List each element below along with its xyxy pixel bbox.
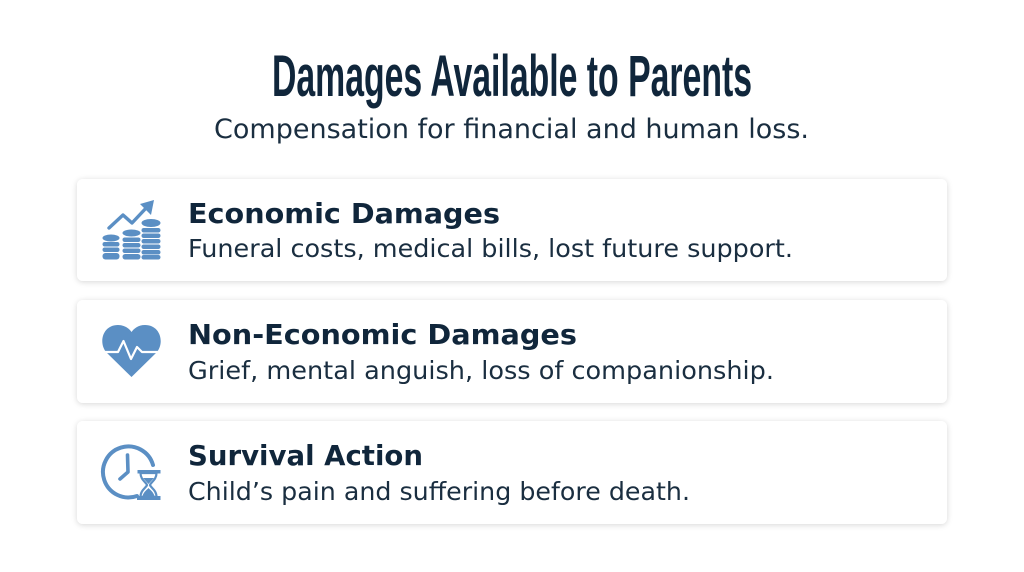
heading: non-economic damages: Non-Economic Damages	[188, 318, 577, 351]
panel: survival action	[77, 421, 947, 524]
heading: survival action: Survival Action	[188, 439, 423, 472]
subtitle: Compensation for financial and human loss.	[214, 114, 809, 145]
icon: heart with pulse	[102, 325, 161, 377]
panel: non-economic damages	[77, 300, 947, 403]
icon: clock with hourglass	[103, 446, 160, 500]
text: economic damages detail: Funeral costs, medical bills, lost future support.	[188, 234, 793, 263]
text: survival action detail: Child’s pain and suffering before death.	[188, 477, 690, 506]
panel: economic damages	[77, 179, 947, 281]
icon: coins with rising arrow	[102, 200, 160, 260]
heading: economic damages: Economic Damages	[188, 197, 500, 230]
text: non-economic damages detail: Grief, mental anguish, loss of companionship.	[188, 356, 774, 385]
